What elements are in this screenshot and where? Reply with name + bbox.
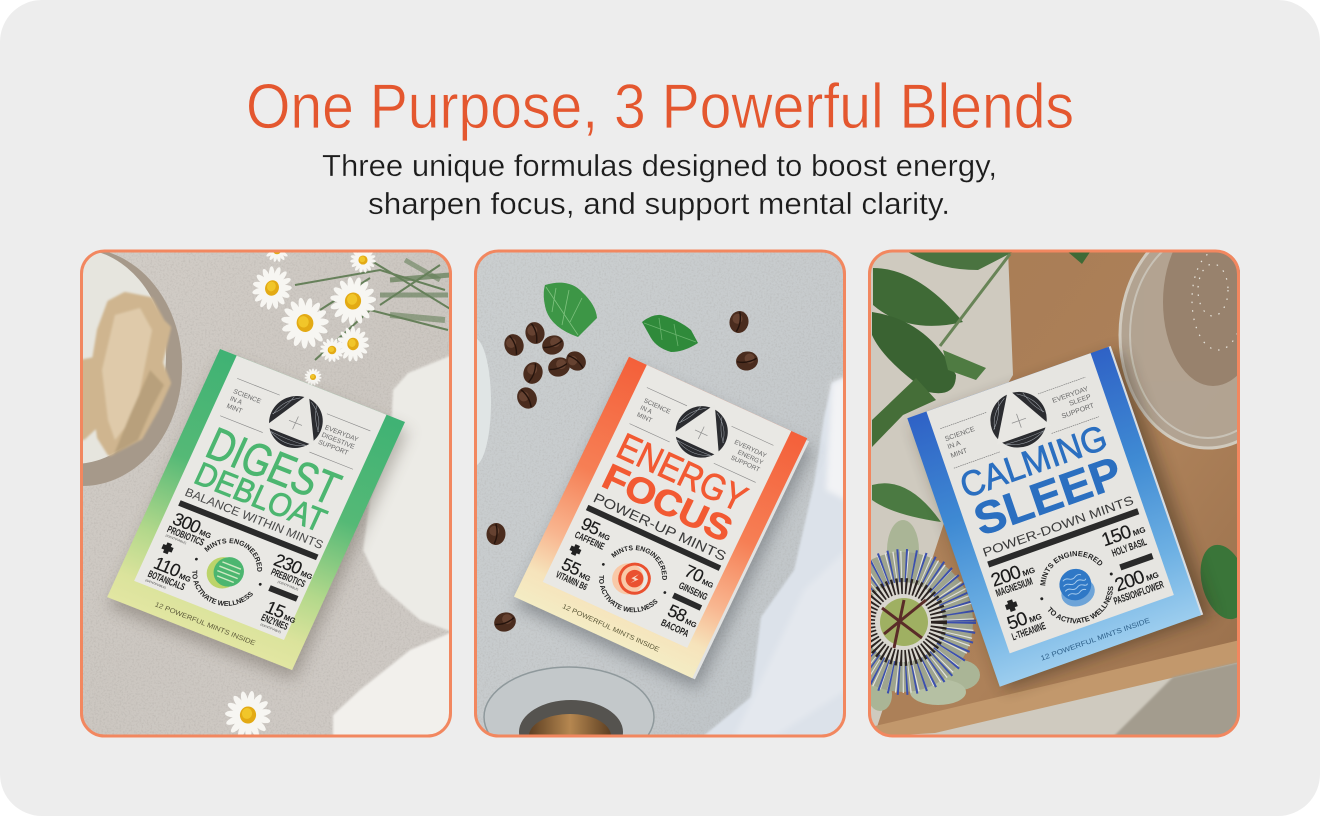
stat: passionflower: PASSIONFLOWER — [1112, 579, 1166, 608]
stat: botanicals: (IDENTIFIABLE) — [145, 578, 167, 590]
ring text and mint icon — [192, 538, 262, 606]
green leaves — [872, 252, 1090, 522]
stat: probiotics: 300MG — [170, 509, 217, 542]
side text right: SUPPORT — [1061, 402, 1096, 420]
side text left: SCIENCE — [944, 426, 976, 443]
stat: passionflower: 200MG — [1112, 562, 1161, 596]
cross icon — [1004, 598, 1019, 613]
stat: holy basil — [1099, 517, 1151, 561]
ring text and mint icon: MINTS ENGINEERED — [1040, 550, 1102, 586]
side text left — [630, 387, 687, 442]
box shadow — [109, 358, 407, 680]
stat: vitamin b6: 55MG — [558, 554, 596, 585]
ring text and mint icon: MINTS ENGINEERED — [611, 545, 667, 580]
coffee beans — [486, 310, 759, 635]
stat: enzymes — [260, 602, 296, 634]
passion flower — [833, 520, 980, 711]
product name: SLEEP — [968, 447, 1128, 546]
white linen — [333, 355, 452, 737]
stat: prebiotics: 230MG — [271, 550, 318, 583]
product name: DEBLOAT — [189, 455, 332, 539]
divider bar — [987, 508, 1139, 568]
mint leaf right — [1193, 540, 1255, 624]
box side — [1107, 346, 1203, 616]
stat: prebiotics: PREBIOTICS — [269, 567, 307, 590]
concrete texture — [474, 250, 846, 737]
concrete background — [474, 250, 846, 737]
side text left — [940, 412, 1000, 468]
panel: energy focus — [474, 250, 846, 738]
divider bar — [586, 505, 721, 571]
cross icon — [161, 542, 174, 554]
stat: caffeine — [573, 513, 616, 553]
stat: bacopa — [659, 600, 702, 641]
side text right: SLEEP — [1068, 393, 1092, 408]
box shadow — [915, 351, 1212, 689]
ring text and mint icon: TO ACTIVATE WELLNESS — [599, 575, 658, 612]
stat: probiotics — [166, 513, 211, 546]
tagline: POWER-UP MINTS — [591, 490, 729, 564]
label — [134, 356, 386, 640]
white fabric — [702, 377, 846, 737]
stat: enzymes: (IDENTIFIABLE) — [260, 622, 282, 634]
chamomile stems — [295, 260, 452, 360]
product box: energy focus — [512, 356, 817, 693]
side text right: ENERGY — [736, 449, 765, 467]
product name — [596, 425, 754, 550]
box side — [690, 439, 809, 679]
stat: bacopa: BACOPA — [659, 618, 690, 640]
side text left: MINT — [225, 403, 243, 415]
box body — [514, 357, 807, 678]
product name — [955, 416, 1128, 546]
stat: l-theanine: L-THEANINE — [1010, 620, 1047, 643]
linen background — [868, 250, 1240, 737]
tagline: POWER-DOWN MINTS — [981, 493, 1135, 560]
chamomile flowers — [252, 252, 376, 386]
glass saucer and espresso — [483, 666, 655, 734]
subtitle: Three unique formulas designed to boost energy, — [322, 148, 997, 183]
side text right — [1038, 377, 1099, 433]
small bar — [672, 593, 702, 611]
panel: digest debloat — [80, 250, 452, 738]
stat: caffeine: CAFFEINE — [573, 530, 606, 553]
box body — [907, 347, 1201, 687]
concrete background — [80, 250, 452, 737]
product name: FOCUS — [596, 456, 739, 550]
stat: holy basil: HOLY BASIL — [1110, 536, 1149, 559]
side text right: SUPPORT — [317, 439, 349, 457]
title: One Purpose, 3 Powerful Blends — [246, 72, 1074, 142]
tagline: BALANCE WITHIN MINTS — [183, 485, 326, 552]
ring text and mint icon: TO ACTIVATE WELLNESS — [1048, 586, 1114, 624]
logo — [981, 380, 1055, 455]
stat: botanicals — [145, 558, 191, 590]
product name: ENERGY — [611, 425, 754, 520]
side text right: SUPPORT — [729, 454, 761, 474]
stat: probiotics: PROBIOTICS — [165, 524, 206, 549]
stat: magnesium: MAGNESIUM — [994, 576, 1034, 600]
box footer text: 12 POWERFUL MINTS INSIDE — [1040, 616, 1151, 663]
side text left: SCIENCE — [232, 388, 263, 406]
product name: CALMING — [955, 416, 1112, 506]
ring text and mint icon: MINTS ENGINEERED — [204, 538, 262, 572]
stat: magnesium — [989, 557, 1040, 600]
stat: bacopa: 58MG — [664, 600, 702, 632]
ring text and mint icon — [599, 545, 667, 612]
side text left: MINT — [950, 447, 969, 460]
panel border — [476, 251, 844, 736]
concrete texture — [80, 250, 452, 737]
stat: prebiotics: (IDENTIFIABLE) — [277, 580, 299, 591]
side text left: IN A — [229, 396, 244, 407]
panel border — [82, 251, 450, 736]
stat: holy basil: 150MG — [1099, 517, 1148, 551]
divider bar — [178, 500, 318, 560]
stat: l-theanine — [1004, 603, 1047, 643]
ring text and mint icon — [1040, 550, 1114, 624]
subtitle: sharpen focus, and support mental clarity. — [368, 186, 950, 221]
leaf stem — [940, 254, 1010, 346]
box shadow — [516, 366, 813, 689]
side text left: IN A — [639, 404, 654, 416]
stat: ginseng: GINSENG — [677, 581, 709, 603]
stat: prebiotics — [270, 554, 312, 591]
logo — [269, 396, 323, 448]
ring text and mint icon: TO ACTIVATE WELLNESS — [192, 570, 253, 606]
stat: vitamin b6 — [554, 553, 597, 593]
stat: ginseng: 70MG — [681, 561, 719, 592]
product name: DIGEST — [199, 417, 348, 515]
stat: enzymes: 15MG — [262, 597, 301, 627]
wooden tray — [868, 250, 1240, 737]
product box: digest debloat — [106, 349, 412, 684]
cross icon — [568, 543, 583, 557]
box footer text: 12 POWERFUL MINTS INSIDE — [153, 601, 257, 647]
stat: botanicals: 110MG — [151, 553, 196, 586]
product name — [194, 427, 344, 530]
stat: caffeine: 95MG — [578, 513, 616, 545]
box footer text: 12 POWERFUL MINTS INSIDE — [561, 603, 661, 654]
stone plate — [80, 252, 182, 486]
stat: passionflower — [1106, 561, 1166, 608]
side text right: EVERYDAY — [733, 439, 768, 460]
side text left: SCIENCE — [642, 397, 672, 416]
side text left: IN A — [947, 440, 962, 451]
small bar — [268, 585, 298, 602]
saucer — [477, 339, 491, 465]
side text right: EVERYDAY — [1052, 386, 1090, 405]
label — [926, 353, 1174, 653]
panel border — [870, 251, 1238, 736]
side text right — [714, 426, 773, 482]
side text right: EVERYDAY — [324, 424, 360, 444]
stat: magnesium: 200MG — [989, 557, 1037, 592]
box body — [107, 349, 405, 670]
glass of water — [1120, 218, 1296, 448]
label — [543, 365, 791, 648]
small bar — [1119, 553, 1154, 570]
stat: vitamin b6: VITAMIN B6 — [554, 569, 589, 593]
stat: enzymes: ENZYMES — [259, 613, 290, 633]
product box: calming sleep — [907, 344, 1218, 694]
side text left — [220, 378, 280, 433]
lower fabric — [1113, 662, 1240, 737]
subtitle — [322, 148, 997, 221]
mint leaves — [544, 283, 698, 352]
side text right — [309, 414, 370, 469]
stat: ginseng — [676, 561, 719, 603]
side text left: MINT — [636, 412, 653, 424]
panel: calming sleep — [868, 250, 1240, 738]
stat: botanicals: BOTANICALS — [146, 569, 187, 593]
side text right: DIGESTIVE — [320, 432, 356, 451]
stat: probiotics: (IDENTIFIABLE) — [165, 533, 187, 545]
logo — [667, 394, 739, 466]
chamomile flower bottom — [225, 691, 271, 734]
ginger root — [80, 295, 168, 454]
stat: l-theanine: 50MG — [1004, 604, 1044, 635]
